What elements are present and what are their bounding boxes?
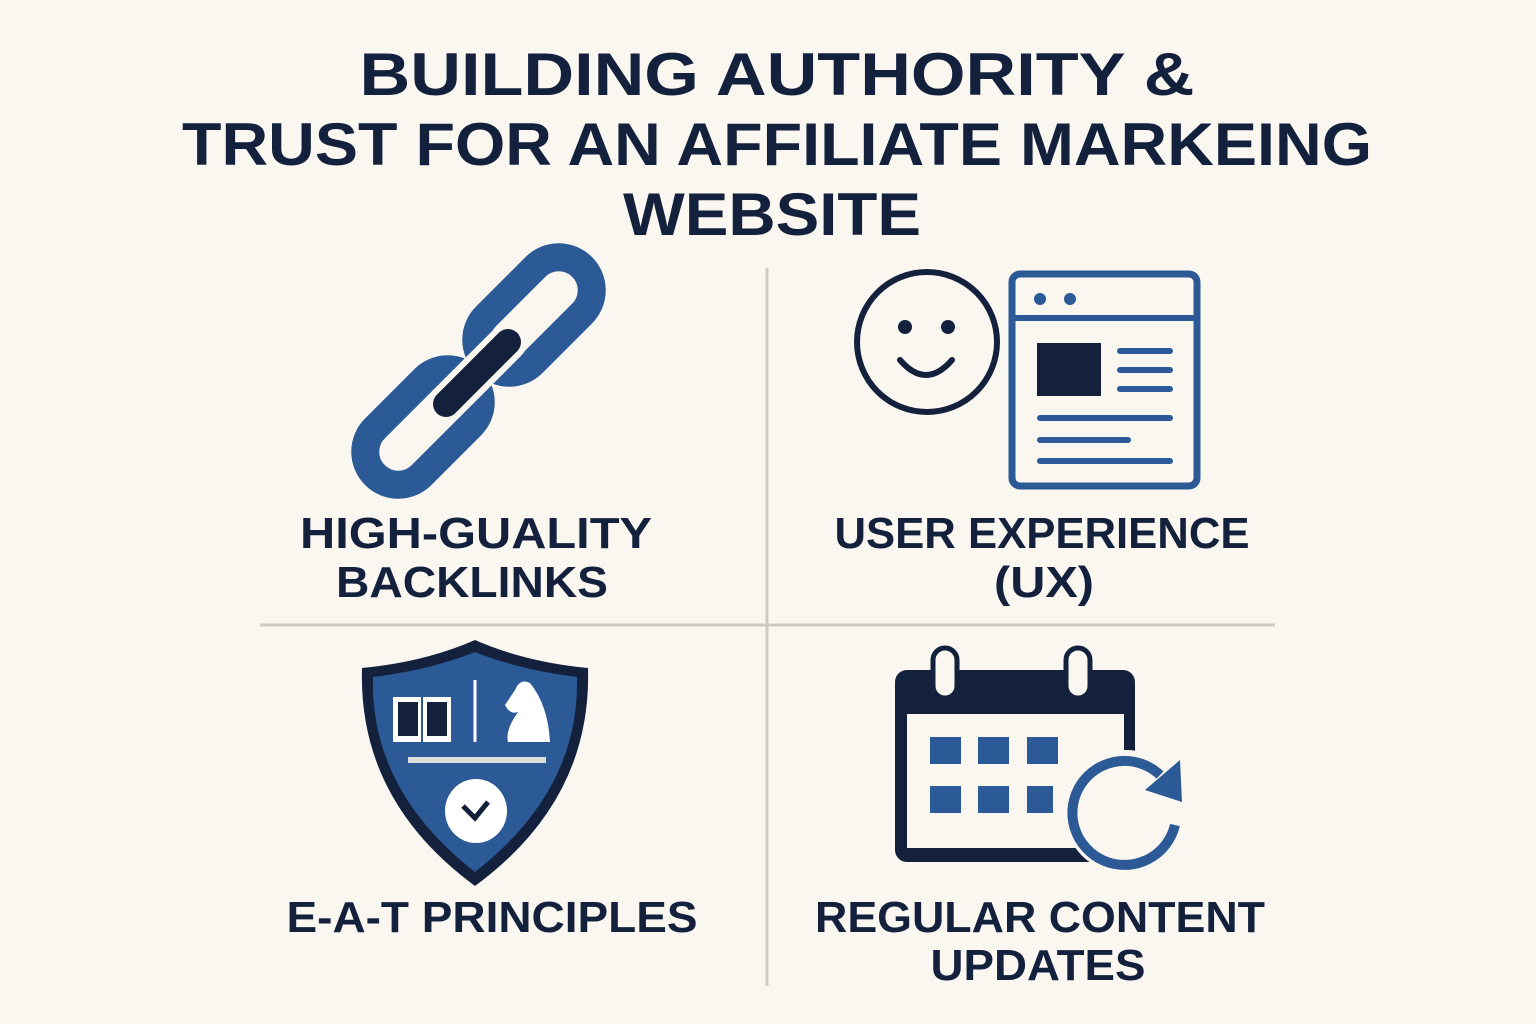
icon: browser window [1012,274,1197,486]
label: content updates line 2: UPDATES [930,941,1146,990]
title: WEBSITE [623,181,921,248]
label: ux: USER EXPERIENCE [834,509,1250,558]
icon: shield [362,640,588,886]
title: BUILDING AUTHORITY & [360,41,1194,108]
panel: user experience [834,272,1250,558]
icon: chain link [352,244,605,498]
panel: content updates [815,648,1265,942]
icon: calendar with refresh [895,648,1188,874]
title: TRUST FOR AN AFFILIATE MARKEING [182,111,1372,178]
panel: backlinks [300,244,652,558]
panel: E-A-T [286,640,698,942]
label: ux line 2: (UX) [994,558,1094,607]
label: E-A-T: E-A-T PRINCIPLES [286,893,698,942]
label: content updates: REGULAR CONTENT [815,893,1265,942]
label: backlinks: HIGH-GUALITY [300,509,652,558]
label: backlinks line 2: BACKLINKS [336,558,608,607]
icon: smiley [857,272,997,412]
title [182,41,1372,248]
